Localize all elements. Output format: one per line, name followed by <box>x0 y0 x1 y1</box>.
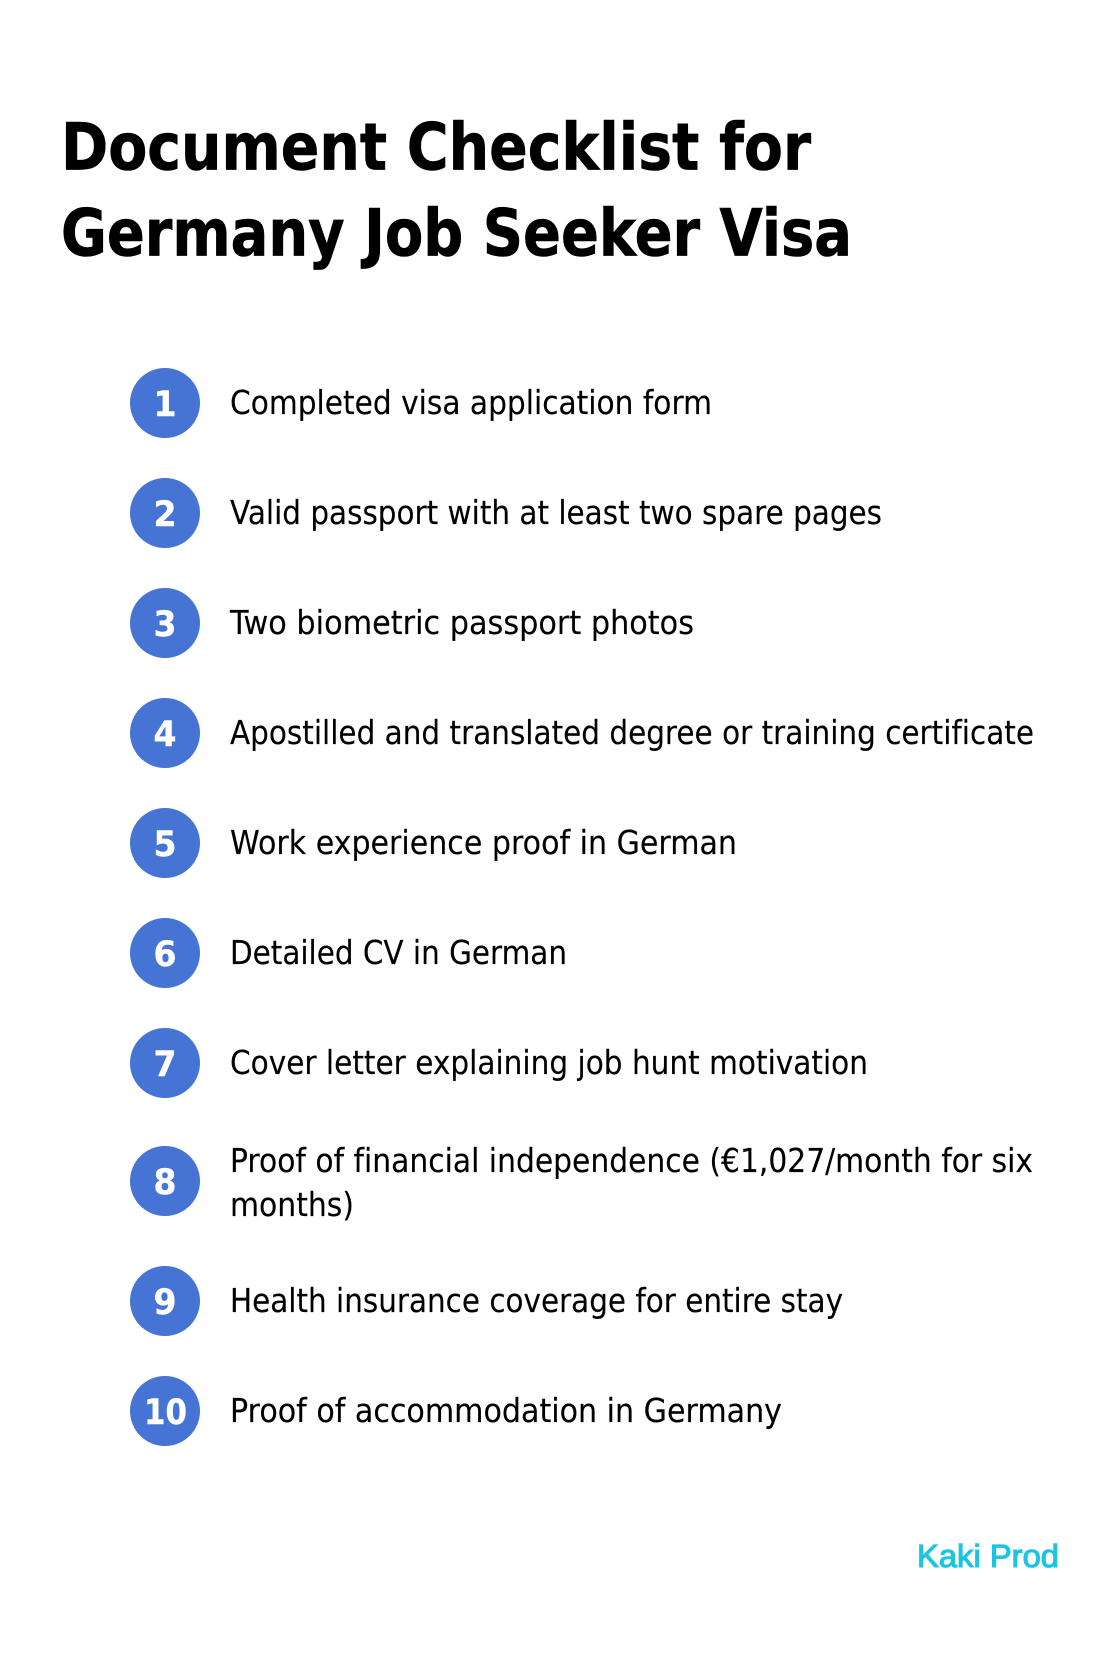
item 5 <box>130 808 737 878</box>
item 2 <box>130 478 882 548</box>
item 1 <box>130 368 712 438</box>
item 6 <box>130 918 567 988</box>
text 6: Detailed CV in German <box>230 933 567 972</box>
badge 5 <box>130 808 200 878</box>
text 9: Health insurance coverage for entire stay <box>230 1281 843 1320</box>
badge 4 <box>130 698 200 768</box>
badge 7: 7 <box>154 1045 176 1085</box>
text 3: Two biometric passport photos <box>229 603 694 642</box>
badge 7 <box>130 1028 200 1098</box>
text 8: Proof of financial independence (€1,027/month for six <box>230 1141 1033 1180</box>
text 8 <box>230 1141 1033 1224</box>
badge 9: 9 <box>154 1283 176 1323</box>
text 7: Cover letter explaining job hunt motivation <box>230 1043 868 1082</box>
text 4: Apostilled and translated degree or training certificate <box>230 713 1034 752</box>
badge 1: 1 <box>154 385 176 425</box>
badge 2: 2 <box>154 495 176 535</box>
badge 10: 10 <box>144 1393 187 1433</box>
text 10: Proof of accommodation in Germany <box>230 1391 782 1430</box>
badge 4: 4 <box>154 715 176 755</box>
badge 6 <box>130 918 200 988</box>
badge 8: 8 <box>154 1163 176 1203</box>
badge 1 <box>130 368 200 438</box>
item 10 <box>130 1376 782 1446</box>
badge 5: 5 <box>154 825 176 865</box>
badge 6: 6 <box>154 935 176 975</box>
text 2: Valid passport with at least two spare pages <box>230 493 882 532</box>
item 4 <box>130 698 1034 768</box>
text 5: Work experience proof in German <box>230 823 737 862</box>
text 1: Completed visa application form <box>230 383 712 422</box>
text 8: months) <box>230 1185 354 1224</box>
title: Document Checklist for <box>61 110 811 186</box>
badge 3: 3 <box>154 605 176 645</box>
logo: Kaki Prod: Kaki Prod <box>917 1538 1059 1574</box>
checklist <box>130 368 1034 1446</box>
title <box>61 110 852 272</box>
item 9 <box>130 1266 843 1336</box>
item 3 <box>130 588 694 658</box>
item 7 <box>130 1028 868 1098</box>
title: Germany Job Seeker Visa <box>61 196 852 272</box>
badge 9 <box>130 1266 200 1336</box>
badge 3 <box>130 588 200 658</box>
item 8 <box>130 1141 1033 1224</box>
badge 10 <box>130 1376 200 1446</box>
badge 8 <box>130 1146 200 1216</box>
badge 2 <box>130 478 200 548</box>
